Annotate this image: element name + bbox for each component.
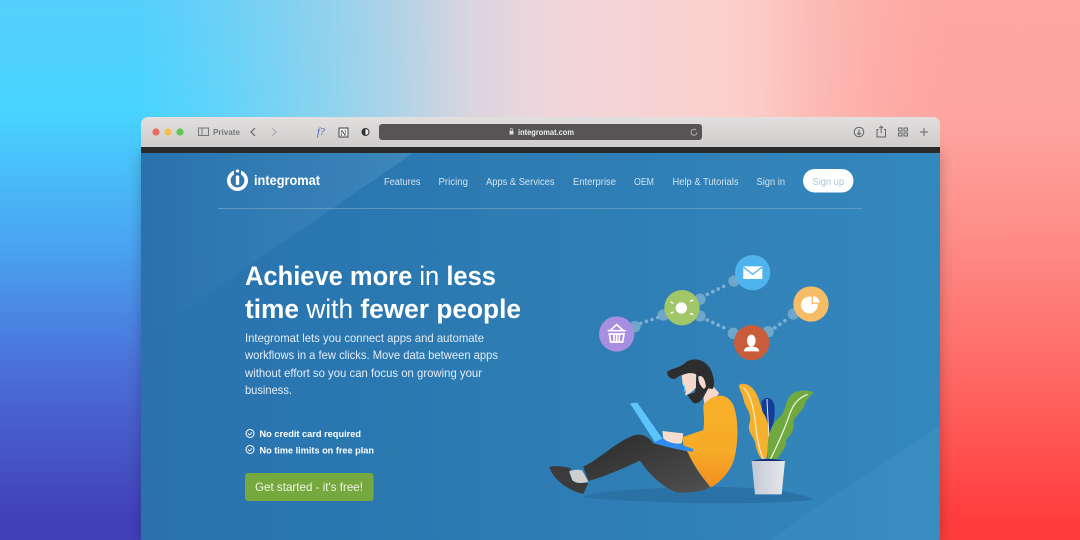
cta button: Get started - it's free! (255, 480, 363, 494)
cta button (245, 473, 374, 501)
navigation: Apps & Services (486, 177, 554, 188)
neck (703, 386, 719, 408)
toolbar icons right (854, 126, 928, 137)
browser window (141, 117, 940, 540)
intro paragraph: workflows in a few clicks. Move data between apps (244, 348, 498, 362)
icon: back and forward (251, 128, 276, 136)
head and laptop (630, 359, 714, 452)
navigation: OEM (634, 177, 654, 188)
legs and shoe (549, 435, 710, 494)
headline: Achieve more in less (245, 261, 496, 291)
node: hub (664, 290, 700, 325)
check item 1: No credit card required (260, 429, 361, 440)
sweater (682, 396, 737, 487)
node: basket (599, 316, 634, 352)
icon: contrast (362, 128, 369, 136)
nav divider (218, 208, 862, 209)
intro paragraph: without effort so you can focus on growing your (244, 366, 482, 380)
node: person (734, 325, 769, 360)
node: mail (735, 255, 770, 290)
workflow diagram (599, 255, 829, 360)
logo: integromat (254, 173, 320, 188)
intro paragraph (244, 331, 498, 397)
icon: extension f: f? (317, 127, 325, 138)
illustration: person with laptop and plant (549, 359, 813, 503)
plant (739, 384, 813, 494)
navigation: Enterprise (573, 177, 616, 188)
backdrop left colour wash (0, 0, 470, 540)
private label: Private (213, 128, 241, 137)
icon: lock (510, 129, 514, 134)
icon: reload (691, 129, 697, 135)
headline: time with fewer people (245, 294, 521, 324)
address bar (379, 124, 702, 140)
headline (245, 261, 521, 324)
navigation: Sign in (756, 177, 785, 188)
navigation (384, 177, 785, 188)
url: integromat.com (518, 128, 574, 137)
logo (229, 169, 320, 189)
icon: notion (339, 128, 348, 138)
intro paragraph: business. (245, 383, 292, 397)
sign up button: Sign up (812, 177, 844, 188)
backdrop right colour wash (802, 0, 1080, 540)
ground shadow (582, 487, 813, 503)
navigation: Help & Tutorials (672, 177, 738, 188)
connectors (629, 275, 799, 339)
icon: notion: N (340, 129, 346, 138)
browser page background (141, 150, 940, 540)
traffic lights (152, 128, 184, 136)
intro paragraph: Integromat lets you connect apps and automate (245, 331, 484, 345)
checklist (246, 429, 374, 456)
browser toolbar (141, 117, 940, 153)
check item 2: No time limits on free plan (260, 446, 374, 456)
navigation: Features (384, 177, 420, 188)
sign up button (803, 169, 854, 192)
node: pie (793, 286, 829, 322)
navigation: Pricing (438, 177, 468, 188)
icon: sidebar (198, 128, 208, 136)
